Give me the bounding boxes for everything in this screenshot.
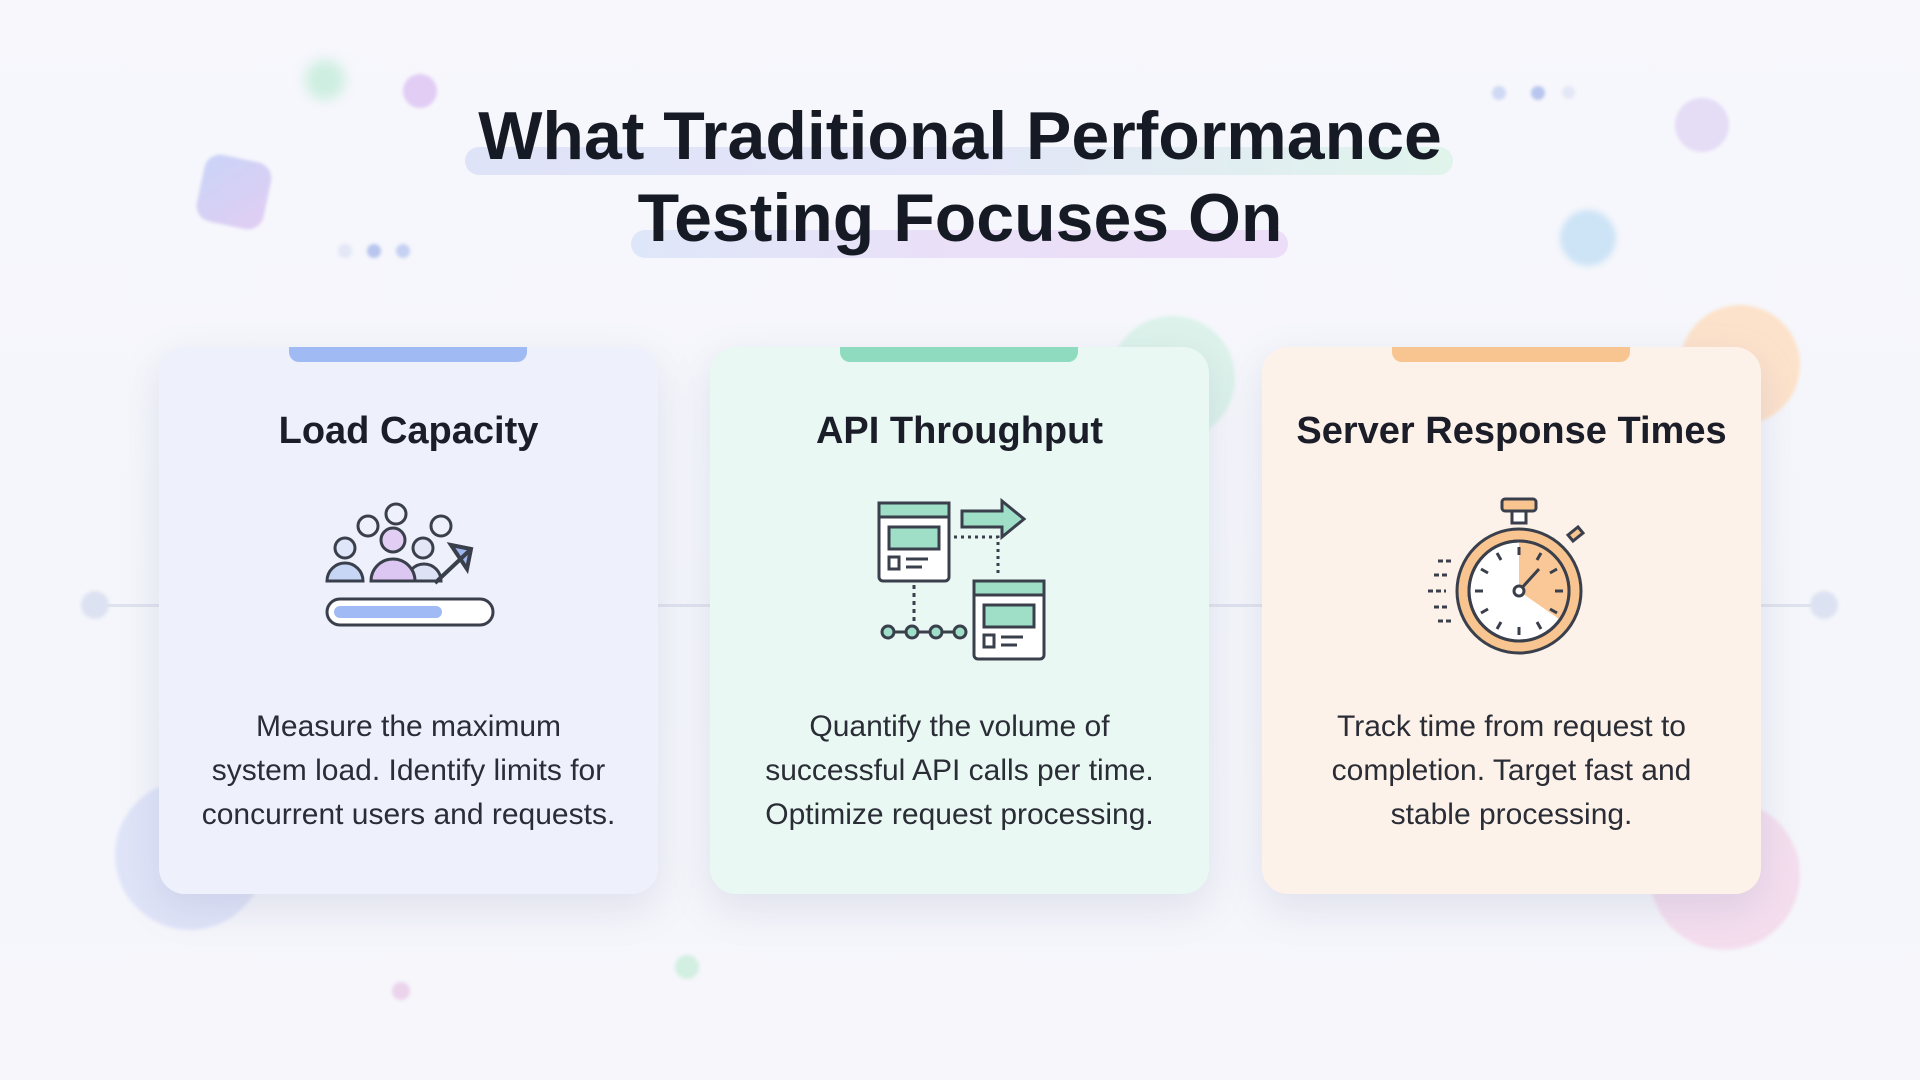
icon: people with arrow and progress bar (326, 502, 494, 626)
text: load capacity (202, 710, 615, 831)
icon: stopwatch (1428, 498, 1586, 654)
text: server response times (1332, 710, 1691, 831)
text: server response times: completion. Target fast and (1332, 754, 1691, 787)
text: load capacity: system load. Identify limits for (212, 754, 605, 787)
heading: server response times: Server Response Times (1296, 410, 1727, 452)
text: server response times: Track time from request to (1337, 710, 1686, 743)
text: load capacity: Measure the maximum (256, 710, 561, 743)
heading: api throughput: API Throughput (816, 410, 1103, 452)
text: server response times: stable processing. (1391, 798, 1632, 831)
title: Testing Focuses On (638, 180, 1282, 256)
text: load capacity: concurrent users and requests. (202, 798, 615, 831)
title: What Traditional Performance (478, 98, 1442, 174)
text: api throughput: Quantify the volume of (809, 710, 1110, 743)
icon: windows and arrow (878, 498, 1046, 660)
panel: load capacity (159, 347, 658, 894)
text: api throughput (765, 710, 1154, 831)
title (478, 98, 1442, 256)
title highlights (465, 147, 1453, 258)
panel: api throughput (710, 347, 1209, 894)
text: api throughput: successful API calls per time. (765, 754, 1154, 787)
text: api throughput: Optimize request processing. (765, 798, 1154, 831)
panel: server response times (1262, 347, 1761, 894)
heading: load capacity: Load Capacity (279, 410, 538, 452)
